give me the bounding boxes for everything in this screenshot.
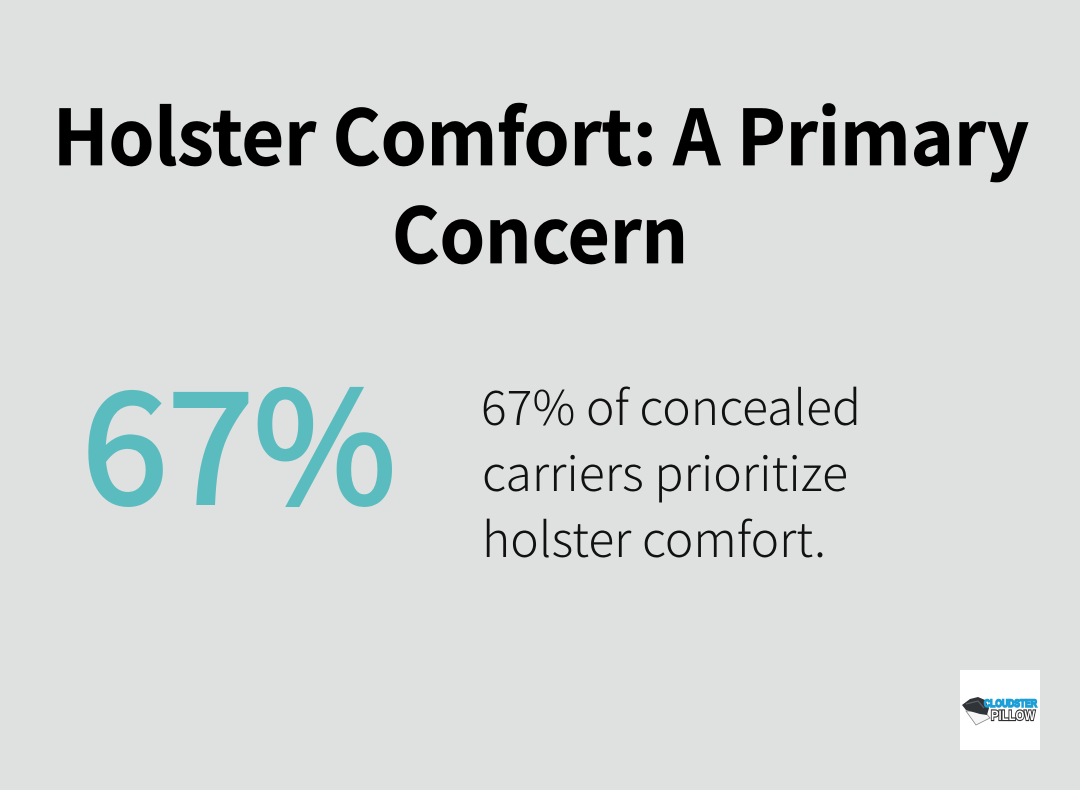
big statistic: 67%: 67% (82, 327, 396, 548)
description text: holster comfort. (482, 501, 826, 571)
title: Holster Comfort: A Primary (53, 77, 1029, 187)
logo wordmark (984, 698, 1037, 723)
logo wordmark: PILLOW (991, 707, 1036, 723)
description text: carriers prioritize (482, 435, 848, 505)
title (53, 77, 1029, 285)
icon: pillow (962, 697, 990, 725)
description text: 67% of concealed (481, 369, 861, 439)
description text (481, 369, 861, 571)
title: Concern (392, 175, 688, 285)
logo wordmark: CLOUDSTER (984, 698, 1037, 710)
logo: Cloudster Pillow (960, 670, 1040, 750)
